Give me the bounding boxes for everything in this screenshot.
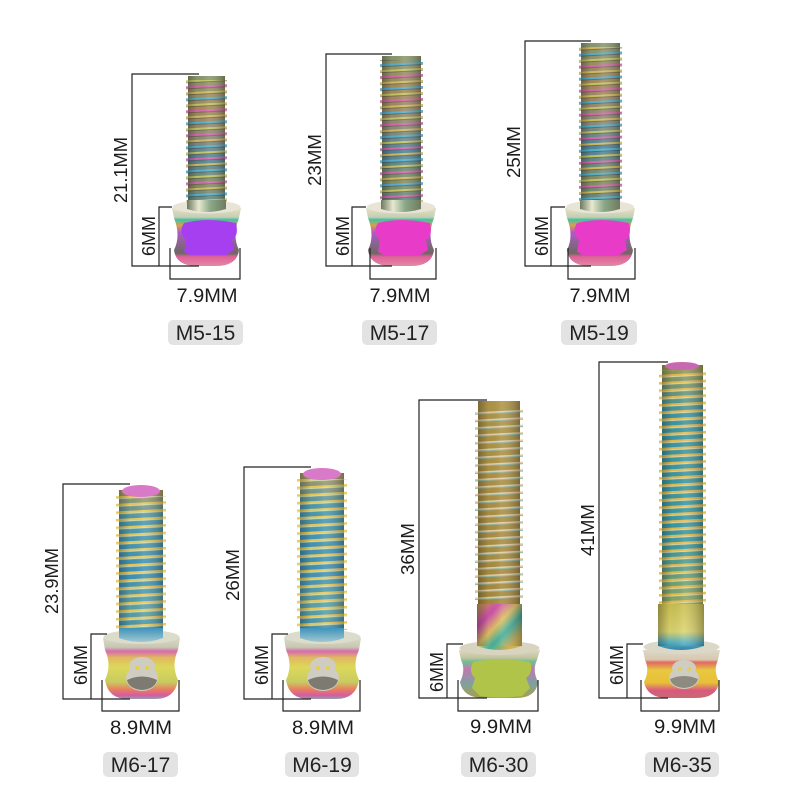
length label: 23MM bbox=[305, 134, 325, 186]
head width label: 7.9MM bbox=[570, 286, 630, 307]
panel: bolt M6-17 bbox=[42, 484, 180, 777]
bolt image M6-17 bbox=[103, 485, 180, 699]
length label: 21.1MM bbox=[111, 137, 131, 203]
length label: 23.9MM bbox=[42, 548, 62, 614]
dimension lines M5-19 bbox=[525, 41, 635, 279]
dimension lines M5-17 bbox=[326, 54, 436, 279]
head height label: 6MM bbox=[139, 216, 159, 256]
dimension lines M6-17 bbox=[63, 484, 179, 711]
head height label: 6MM bbox=[71, 645, 91, 685]
model tag: M6-35 bbox=[652, 754, 712, 777]
head height label: 6MM bbox=[333, 216, 353, 256]
dimension lines M6-35 bbox=[599, 362, 719, 711]
panel: bolt M5-19 bbox=[504, 41, 637, 345]
bolt image M6-19 bbox=[284, 468, 361, 699]
panel: bolt M5-17 bbox=[305, 54, 437, 345]
length label: 26MM bbox=[223, 549, 243, 601]
head height label: 6MM bbox=[532, 216, 552, 256]
model tag: M5-15 bbox=[176, 322, 235, 345]
head height label: 6MM bbox=[607, 645, 627, 685]
dimension lines M6-30 bbox=[419, 400, 538, 711]
model tag: M6-17 bbox=[111, 754, 170, 777]
head width label: 8.9MM bbox=[292, 718, 354, 739]
panel: bolt M6-35 bbox=[578, 362, 720, 777]
head width label: 7.9MM bbox=[370, 286, 430, 307]
length label: 36MM bbox=[398, 523, 418, 575]
head width label: 8.9MM bbox=[110, 718, 172, 739]
model tag: M6-19 bbox=[292, 754, 352, 777]
panel: bolt M6-19 bbox=[223, 467, 361, 777]
dimension lines M5-15 bbox=[132, 74, 240, 279]
head width label: 9.9MM bbox=[654, 717, 716, 738]
length label: 41MM bbox=[578, 504, 598, 556]
length label: 25MM bbox=[504, 126, 524, 178]
head height label: 6MM bbox=[252, 645, 272, 685]
bolt image M6-30 bbox=[459, 401, 540, 698]
model tag: M5-17 bbox=[370, 322, 429, 345]
head width label: 7.9MM bbox=[176, 286, 238, 307]
head width label: 9.9MM bbox=[470, 717, 532, 738]
bolt image M5-15 bbox=[172, 76, 241, 266]
bolt image M5-19 bbox=[565, 43, 635, 266]
bolt image M6-35 bbox=[643, 362, 720, 698]
head height label: 6MM bbox=[427, 652, 447, 692]
model tag: M6-30 bbox=[469, 754, 528, 777]
model tag: M5-19 bbox=[569, 322, 629, 345]
bolt image M5-17 bbox=[366, 56, 436, 266]
panel: bolt M6-30 bbox=[398, 400, 540, 777]
dimension lines M6-19 bbox=[244, 467, 360, 711]
panel: bolt M5-15 bbox=[111, 74, 243, 345]
